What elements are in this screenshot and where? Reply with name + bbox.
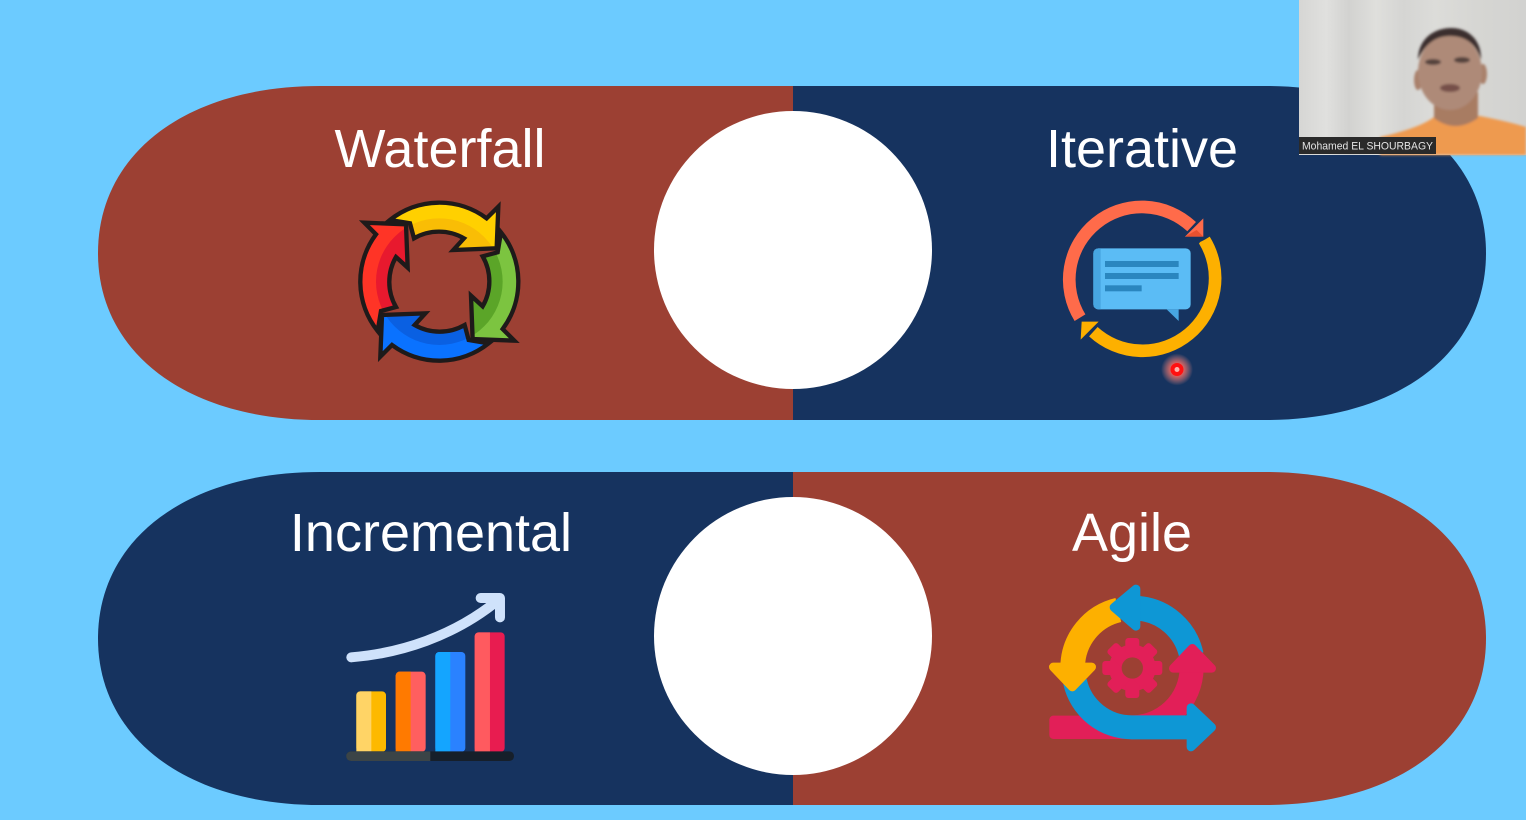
icon: red laser pointer (1161, 354, 1193, 386)
name tag (1299, 137, 1436, 154)
icon: incremental bar chart with arrow (346, 598, 514, 761)
panel: bottom pill (98, 472, 1486, 805)
panel: top pill (98, 86, 1486, 420)
icon: iterative cycle with speech bubble (1069, 207, 1215, 351)
heading: Incremental: Incremental (290, 503, 572, 563)
heading: Waterfall: Waterfall (334, 119, 546, 179)
rising arrow (351, 598, 500, 657)
heading: Iterative: Iterative (1046, 119, 1238, 179)
icon: waterfall cycle arrows (360, 203, 518, 361)
heading: Agile: Agile (1072, 503, 1192, 563)
presenter figure (1380, 28, 1526, 155)
icon: agile cycle with gear (1049, 589, 1212, 747)
panel: webcam video (1299, 0, 1526, 155)
presenter name: Mohamed EL SHOURBAGY (1302, 140, 1434, 152)
